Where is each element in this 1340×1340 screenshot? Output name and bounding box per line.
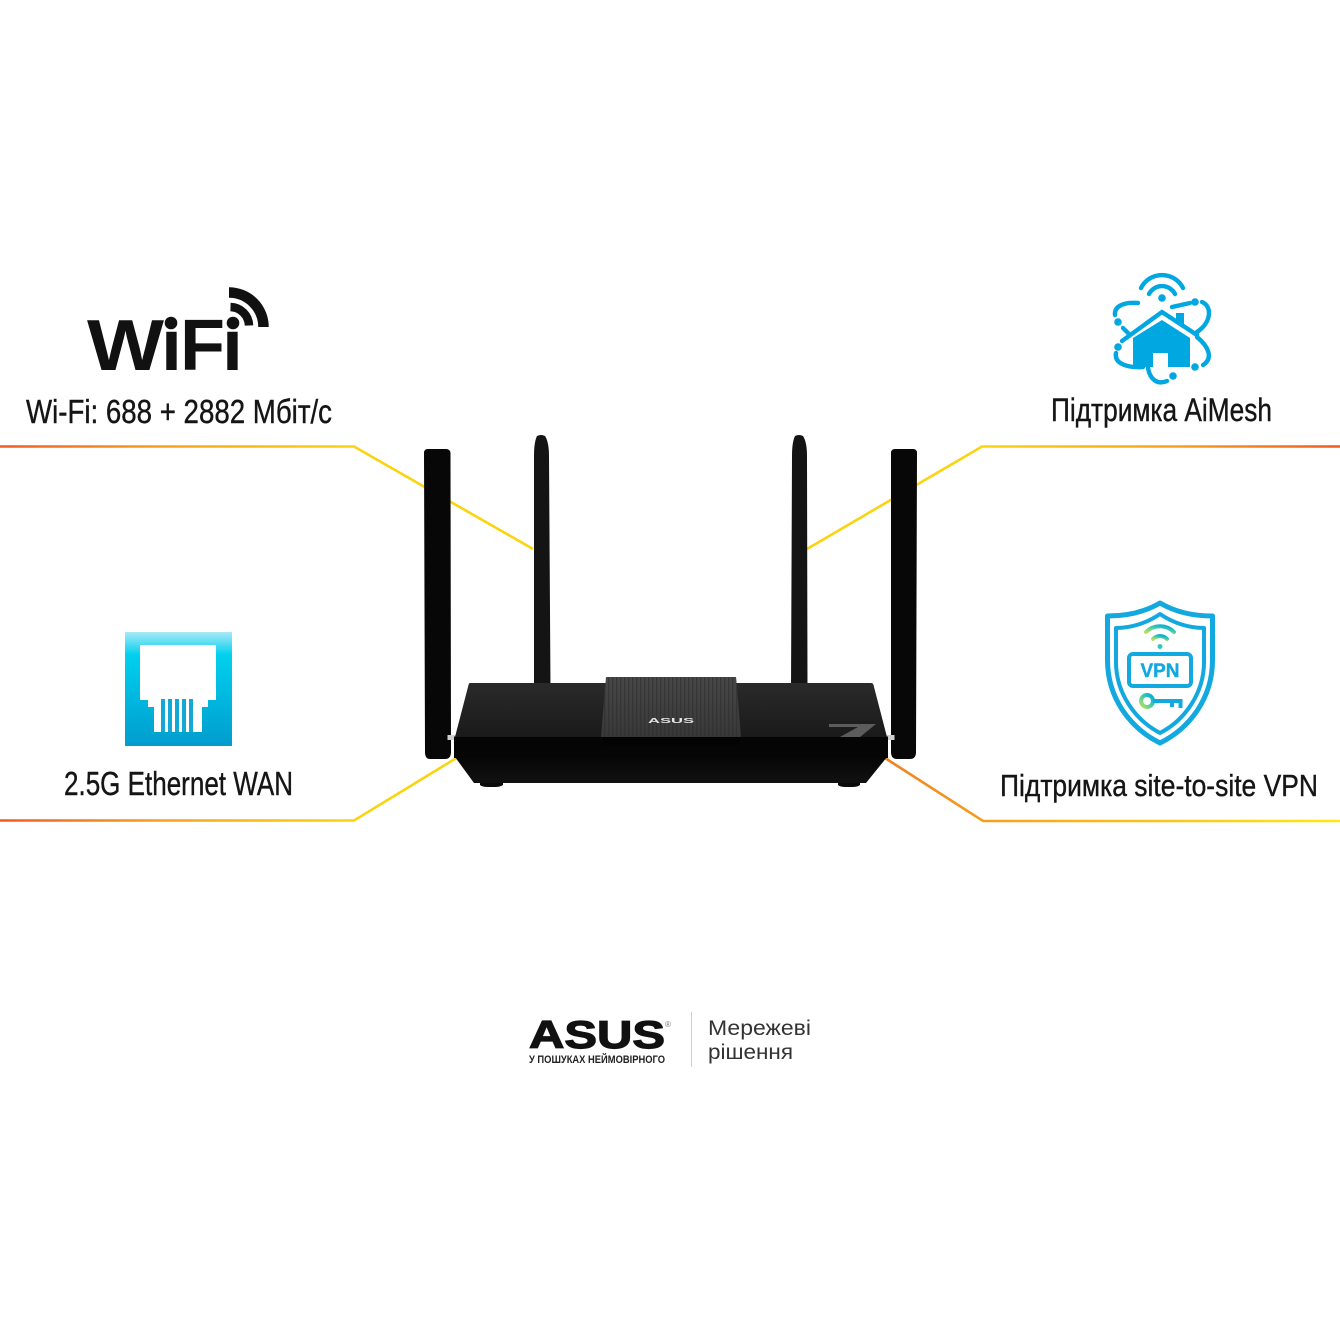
router centre panel xyxy=(601,677,741,745)
connector line: top left xyxy=(0,446,533,549)
label: network solutions xyxy=(708,1017,811,1064)
antenna: outer right xyxy=(891,449,917,759)
icon: WiFi logo: F xyxy=(180,306,225,386)
icon: AiMesh home xyxy=(1114,275,1209,382)
connector line: bottom left xyxy=(0,757,458,820)
icon: WiFi logo: i xyxy=(222,306,243,386)
router xyxy=(424,435,917,787)
divider xyxy=(691,1012,692,1067)
label: 2.5G Ethernet WAN: 2.5G Ethernet WAN xyxy=(64,765,293,802)
icon: VPN shield: VPN xyxy=(1140,661,1180,682)
icon: VPN shield xyxy=(1108,603,1212,743)
label: Wi-Fi speed: Wi-Fi: 688 + 2882 Мбіт/с xyxy=(26,393,332,430)
icon: Ethernet port xyxy=(125,632,232,746)
icon: WiFi logo: W xyxy=(87,306,164,386)
ASUS wordmark: ASUS xyxy=(529,1014,665,1057)
router lower body xyxy=(455,757,887,783)
router front band xyxy=(454,736,888,758)
label: network solutions: рішення xyxy=(708,1041,793,1064)
label: AiMesh: Підтримка AiMesh xyxy=(1051,392,1272,428)
connector line: bottom right xyxy=(885,758,1340,821)
brand logo xyxy=(529,1014,671,1066)
tagline: У ПОШУКАХ НЕЙМОВІРНОГО xyxy=(529,1053,665,1066)
registered mark: ® xyxy=(665,1020,671,1029)
antenna: inner left xyxy=(534,435,550,690)
hinges xyxy=(448,735,894,740)
model mark 7 xyxy=(829,724,876,737)
label: network solutions: Мережеві xyxy=(708,1017,811,1040)
router top xyxy=(455,683,887,737)
router feet xyxy=(480,782,860,787)
connector line: top right xyxy=(807,446,1340,549)
icon: WiFi logo xyxy=(87,292,264,386)
panel logo: ASUS xyxy=(648,718,695,725)
icon: WiFi logo: i xyxy=(161,306,182,386)
antenna: inner right xyxy=(791,435,808,690)
antenna: outer left xyxy=(424,449,451,759)
